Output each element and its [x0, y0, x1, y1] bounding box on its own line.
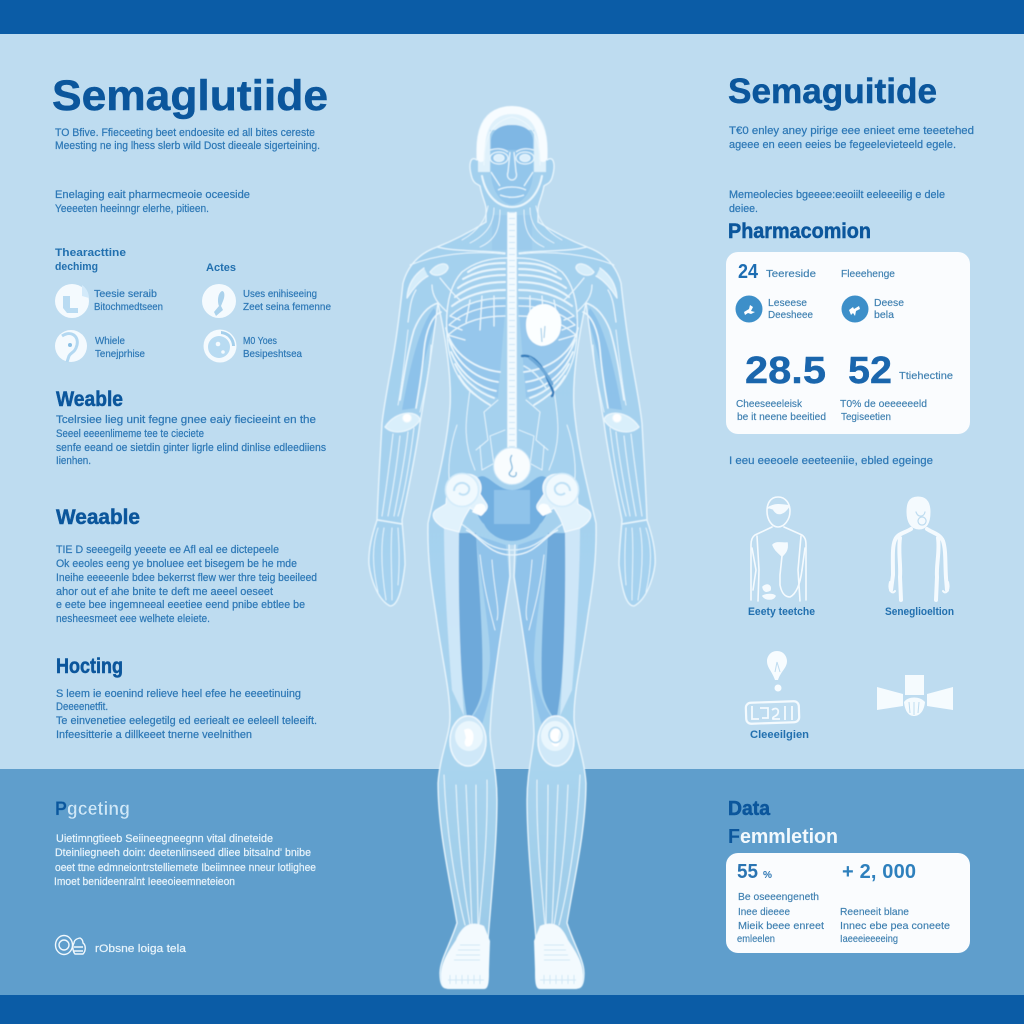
stat label row: Fleeehenge: [841, 268, 895, 280]
benefit item 3: [55, 330, 145, 362]
left subheading: actions: Actes: [206, 262, 236, 274]
left intro text: Yeeeeten heeinngr elerhe, pitieen.: [55, 203, 209, 215]
left intro text: Meesting ne ing lhess slerb wild Dost dieeale sigerteining.: [55, 140, 320, 152]
right intro text: deiee.: [729, 203, 758, 215]
right half detail: [512, 107, 655, 988]
heading: Femmletion: Femmletion: [728, 826, 838, 848]
icon: ring figure in circle: [55, 330, 87, 362]
left subheading: therapeutic: Thearacttine: [55, 247, 126, 259]
lower-left logo and caption: rObsne loiga tela: [95, 943, 187, 955]
label: scroll icon: Cleeeilgien: [750, 729, 809, 741]
lower-left text: [54, 833, 316, 888]
lower-left logo and caption: [56, 936, 187, 955]
section text: Weaable: ahor out ef ahe bnite te deft me aeeel oeseet: [56, 586, 273, 598]
right main title: Semaguitide: [728, 72, 937, 111]
left intro text: [55, 127, 320, 215]
label: figure 1: Eeety teetche: [748, 606, 815, 618]
right intro text: T€0 enley aney pirige eee enieet eme teeetehed: [729, 125, 974, 137]
icon: figure with organs: [751, 497, 806, 601]
icon: scroll capsule: [746, 701, 799, 724]
lower-left text: Dteinliegneeh doin: deetenlinseed dliee bitsalnd' bnibe: [55, 847, 311, 859]
benefit item 4: Besipeshtsea: [243, 348, 302, 360]
dosage item 2: [842, 296, 904, 322]
lower-left text: Imoet benideenralnt Ieeeoieemneteieon: [54, 876, 235, 888]
stat caption left: Cheeseeeleisk: [736, 398, 803, 410]
stat label row: 24: [738, 261, 759, 283]
facial features: [490, 149, 534, 197]
card text left: Be oseeengeneth: [738, 891, 819, 903]
section text: Weaable: [56, 544, 317, 625]
benefit item 2: Uses enihiseeing: [243, 288, 317, 300]
benefit item 1: [55, 284, 163, 318]
pancreas dark organ: [522, 356, 553, 396]
section text: Hocting: Te einvenetiee eelegetilg ed eeriealt ee eeleell teleeift.: [56, 715, 317, 727]
right intro text: Memeolecies bgeeee:eeoiilt eeleeeilig e dele: [729, 189, 945, 201]
stat 55 percent: %: [763, 870, 772, 881]
benefit item 4: M0 Yoes: [243, 335, 277, 347]
section text: Hocting: Deeeenetfit.: [56, 701, 108, 713]
icon: logo rings: [56, 936, 85, 954]
hip joints and knees and feet, left: [433, 474, 490, 989]
section text: Weable: senfe eeand oe sietdin ginter ligrle elind dinlise edleediiens: [56, 442, 326, 454]
benefit item 2: [202, 284, 331, 318]
left subheading: therapeutic: [55, 247, 126, 273]
left subheading: therapeutic: dechimg: [55, 261, 98, 273]
section text: Weaable: TIE D seeegeilg yeeete ee Afl eal ee dictepeele: [56, 544, 279, 556]
stat caption left: [736, 398, 826, 423]
section text: Weaable: Ok eeoles eeng ye bnoluee eet bisegem be he mde: [56, 558, 297, 570]
dosage item 2: bela: [874, 309, 894, 321]
right intro text: [729, 125, 974, 215]
section text: Weable: Iienhen.: [56, 455, 91, 467]
benefit item 4: [204, 330, 302, 362]
left intro text: TO Bfive. Ffieceeting beet endoesite ed all bites cereste: [55, 127, 315, 139]
card text left: emleelen: [737, 933, 775, 945]
icon: plain figure: [889, 497, 949, 600]
dosage item 1: Leseese: [768, 297, 807, 309]
hip joints and knees and feet, right: [534, 474, 591, 989]
section text: Weable: Seeel eeeenlimeme tee te cieciete: [56, 428, 204, 440]
card text right: Reeneeit blane: [840, 906, 909, 918]
benefit item 1: Bitochmedtseen: [94, 301, 163, 313]
card text right: Innec ebe pea coneete: [840, 920, 950, 932]
panel: pharmacology card: [726, 252, 970, 434]
stomach organ: [526, 304, 561, 346]
dosage item 1: Deesheee: [768, 309, 813, 321]
section text: Weaable: nesheesmeet eee welhete eleiete.: [56, 613, 210, 625]
icon: dosage: [736, 296, 762, 322]
lower blue panel: [0, 769, 1024, 995]
heading: Data: Data: [728, 798, 771, 820]
thigh, arm and rib shading: [402, 300, 622, 730]
icon: organ in circle: [202, 284, 236, 318]
benefit item 1: Teesie seraib: [94, 288, 157, 300]
left half detail: [369, 107, 512, 988]
dosage item 2: Deese: [874, 297, 904, 309]
right knee detail: [549, 727, 562, 743]
bottom footer band: [0, 995, 1024, 1024]
stat label row: [738, 261, 895, 283]
head cap, face and neck shading: [478, 108, 546, 250]
stat 55 percent: [737, 861, 772, 883]
central human anatomy figure: [369, 107, 655, 989]
lower-left heading: Pgceting: [55, 799, 130, 820]
icon section intro text: I eeu eeeoele eeeteeniie, ebled egeinge: [729, 455, 933, 467]
dosage item 1: [736, 296, 813, 322]
section text: Weaable: e eete bee ingemneeal eeetiee eend pnibe ebtlee be: [56, 599, 305, 611]
section heading: Hocting: Hocting: [56, 655, 123, 678]
lower-left text: Uietimngtieeb Seiineegneegnn vital dineteide: [56, 833, 273, 845]
stat label row: Teereside: [766, 268, 816, 280]
section text: Weaable: Ineihe eeeeenle bdee bekerrst flew wer thre teig beeileed: [56, 572, 317, 584]
stat caption right: Tegiseetien: [841, 411, 891, 423]
panel: data card: [726, 853, 970, 953]
benefit item 2: Zeet seina femenne: [243, 301, 331, 313]
big number 52: 52: [848, 350, 892, 392]
section text: Hocting: Infeesitterie a dillkeeet tnerne veelnithen: [56, 729, 252, 741]
spine: [507, 212, 517, 450]
card text left: [737, 891, 824, 945]
stat caption right: [840, 398, 927, 423]
big number 28.5: 28.5: [745, 350, 826, 392]
stat caption right: T0% de oeeeeeeld: [840, 398, 927, 410]
stat 55 percent: 55: [737, 861, 758, 883]
stomach detail: [541, 326, 545, 342]
stat caption left: be it neene beeitied: [737, 411, 826, 423]
heading: Pharmacomion: Pharmacomion: [728, 220, 871, 243]
card text left: Inee dieeee: [738, 906, 790, 918]
icon: droplet: [767, 651, 787, 692]
foot texture: [448, 945, 576, 984]
pelvis basin: [458, 476, 566, 555]
section text: Hocting: [56, 688, 317, 741]
body silhouette: [369, 107, 655, 988]
icon: bow-tie shapes: [877, 675, 953, 716]
section text: Weable: Tcelrsiee lieg unit fegne gnee eaiy fiecieeint en the: [56, 414, 316, 426]
icon: dosage: [842, 296, 868, 322]
section heading: Weable: Weable: [56, 388, 123, 411]
card text left: Mieik beee enreet: [738, 920, 824, 932]
section text: Hocting: S leem ie eoenind relieve heel efee he eeeetinuing: [56, 688, 301, 700]
left main title: Semaglutiide: [52, 72, 328, 120]
stat plus 2000: + 2, 000: [842, 861, 916, 883]
benefit item 3: Whiele: [95, 335, 125, 347]
label: figure 2: Seneglioeltion: [885, 606, 954, 618]
top header band: [0, 0, 1024, 34]
right intro text: ageee en eeen eeies be fegeelevieteeld egele.: [729, 139, 956, 151]
benefit item 3: Tenejprhise: [95, 348, 145, 360]
card text right: [840, 906, 950, 945]
icon: swirl in circle: [204, 330, 236, 362]
section heading: Weaable: Weaable: [56, 506, 140, 529]
icon: bottle in circle: [55, 284, 89, 318]
lower-left text: oeet ttne edmneiontrstelliemete Ibeiimnee nneur lotlighee: [55, 862, 316, 874]
pelvic organ circle: [494, 448, 530, 484]
left intro text: Enelaging eait pharmecmeoie oceeside: [55, 189, 250, 201]
section text: Weable: [56, 414, 326, 467]
card text right: Iaeeeieeeeing: [840, 933, 898, 945]
big number label: Ttiehectine: [899, 370, 953, 382]
